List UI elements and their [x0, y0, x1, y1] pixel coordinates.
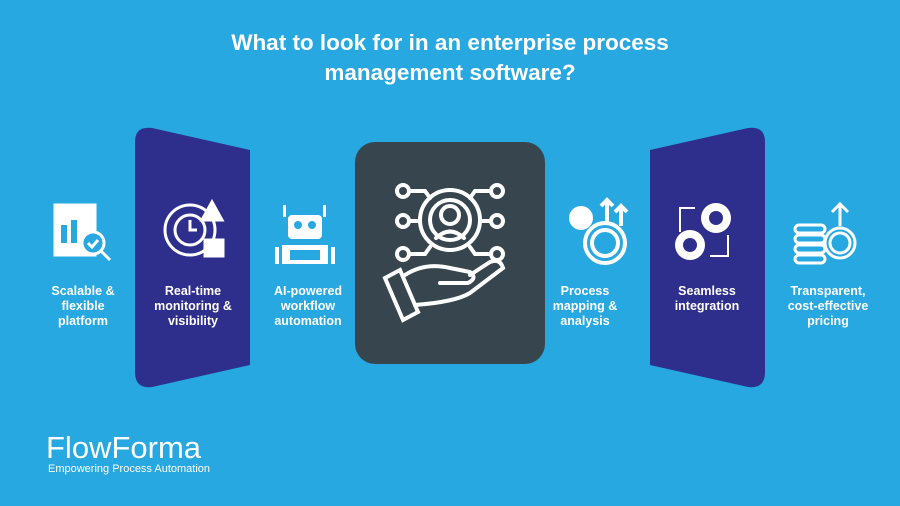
text: pricing — [788, 284, 868, 328]
text: pricing: Transparent, — [790, 284, 866, 298]
icon: pricing — [795, 204, 855, 263]
text: process mapping — [553, 284, 617, 328]
text: AI: workflow — [280, 299, 335, 313]
text: monitoring: monitoring & — [154, 299, 232, 313]
text: monitoring — [154, 284, 232, 328]
icon: monitoring — [165, 202, 223, 256]
icon: scalable platform — [55, 205, 110, 260]
text: AI: AI-powered — [274, 284, 342, 298]
text: scalable — [51, 284, 115, 328]
icon: process mapping — [571, 200, 627, 263]
text: integration: integration — [675, 299, 739, 313]
text: pricing: pricing — [807, 314, 849, 328]
text: AI: automation — [274, 314, 342, 328]
panel: left purple — [135, 128, 250, 387]
panel: right purple — [650, 128, 765, 387]
text: process mapping: Process — [561, 284, 609, 298]
icon: robot — [275, 205, 335, 264]
logo: Empowering Process Automation — [48, 463, 210, 475]
icon: integration — [675, 203, 731, 260]
text: process mapping: analysis — [560, 314, 610, 328]
text: scalable: Scalable & — [51, 284, 115, 298]
logo: FlowForma — [46, 430, 202, 465]
text: scalable: flexible — [61, 299, 105, 313]
text: process mapping: mapping & — [553, 299, 617, 313]
icon: center gear hand — [385, 185, 503, 320]
text: AI — [274, 284, 342, 328]
text: monitoring: Real-time — [165, 284, 221, 298]
panel: center box — [355, 142, 545, 364]
text: scalable: platform — [58, 314, 108, 328]
text: integration: Seamless — [678, 284, 736, 298]
text: integration — [675, 284, 739, 313]
title: What to look for in an enterprise process — [231, 30, 669, 55]
text: pricing: cost-effective — [788, 299, 868, 313]
text: monitoring: visibility — [168, 314, 218, 328]
title — [231, 30, 669, 85]
title: management software? — [324, 60, 576, 85]
